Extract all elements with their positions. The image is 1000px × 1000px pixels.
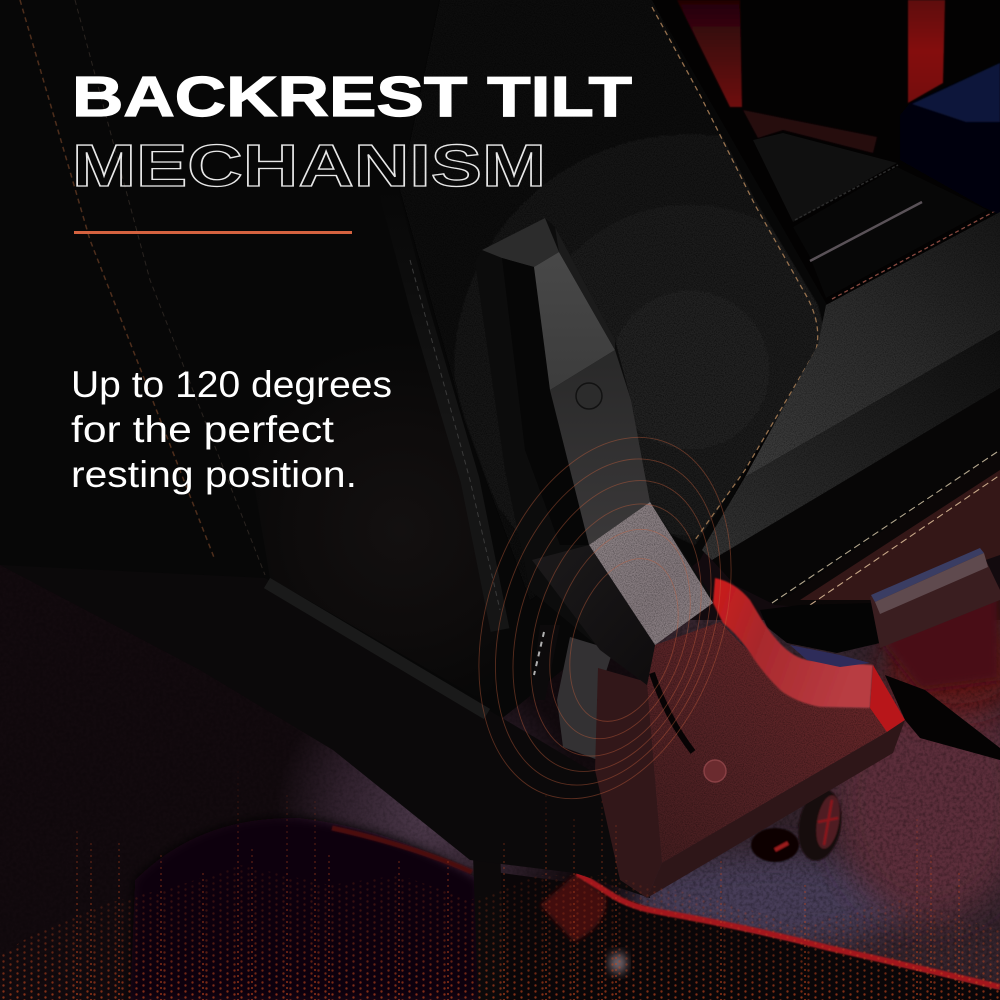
orange divider rule: [74, 231, 352, 234]
tilt pivot joint: [530, 625, 613, 760]
reflected light spot: [610, 953, 626, 973]
foot: main face: [647, 622, 887, 863]
arm: top cap facet: [482, 218, 559, 267]
arm: middle facet: [550, 350, 650, 545]
arm: upper light facet: [534, 252, 615, 390]
chair leg: [472, 825, 505, 1000]
leather panel: [400, 0, 824, 600]
seat grey band: [702, 330, 1000, 560]
halftone dot equalizer pattern: [0, 760, 1000, 1000]
foot: blue-tinted edge: [790, 645, 870, 667]
recline lever handle: [760, 548, 1000, 653]
seat grain: [702, 212, 1000, 560]
concentric motion arcs: [435, 405, 775, 831]
seat grey panel: [745, 212, 1000, 477]
description text: [71, 364, 392, 495]
red light line on floor: [332, 828, 1000, 987]
backrest: [0, 0, 830, 720]
foot: slit: [652, 673, 693, 752]
shadow under chair: [130, 818, 480, 1000]
black suede band: [712, 388, 1000, 605]
carpet floor: [0, 540, 1000, 1000]
seat recess lines: [795, 165, 997, 299]
stitching: [20, 0, 818, 610]
arm: lower dark section: [532, 545, 655, 685]
dark floor beyond red line: [480, 870, 1000, 1000]
red glow on floor: [540, 873, 606, 942]
arm: side facet: [502, 258, 589, 545]
red background slits: [677, 0, 945, 107]
foot: bolt: [704, 760, 726, 782]
brown leather band: [775, 450, 1000, 610]
caster wheel: [751, 786, 847, 864]
floor red right of base: [880, 590, 1000, 690]
description line 1: Up to 120 degrees: [71, 364, 392, 405]
lever: tilt arm: [475, 218, 713, 685]
arm: block speckle: [589, 502, 713, 645]
foot: speckle: [647, 622, 887, 863]
description line 2: for the perfect: [71, 409, 335, 450]
blue cushion: [900, 63, 1000, 215]
title line 2: outlined: MECHANISM: [72, 133, 546, 199]
piping band: [267, 583, 487, 714]
description line 3: resting position.: [71, 454, 357, 495]
title: [72, 65, 632, 199]
arm: bright lower block: [589, 502, 713, 645]
foot: dark bevel: [647, 720, 905, 898]
seam zipper: [388, 190, 500, 630]
leather grain: [400, 0, 824, 600]
lever: base foot: [595, 578, 905, 898]
velvet lower edge: [0, 565, 650, 898]
seat recess: [793, 167, 987, 298]
foot: bright front facet: [870, 665, 905, 732]
foot: dark rear shell: [595, 668, 662, 898]
arm: edge facet: [555, 227, 615, 350]
power cable: [885, 675, 1000, 760]
left side panel glow: [230, 190, 500, 705]
title line 1: BACKREST TILT: [72, 65, 632, 129]
arm: bolt: [576, 383, 602, 409]
seat: top section: [743, 110, 997, 299]
suede stitching: [772, 450, 1000, 605]
foot: lit red top surface: [713, 578, 873, 708]
